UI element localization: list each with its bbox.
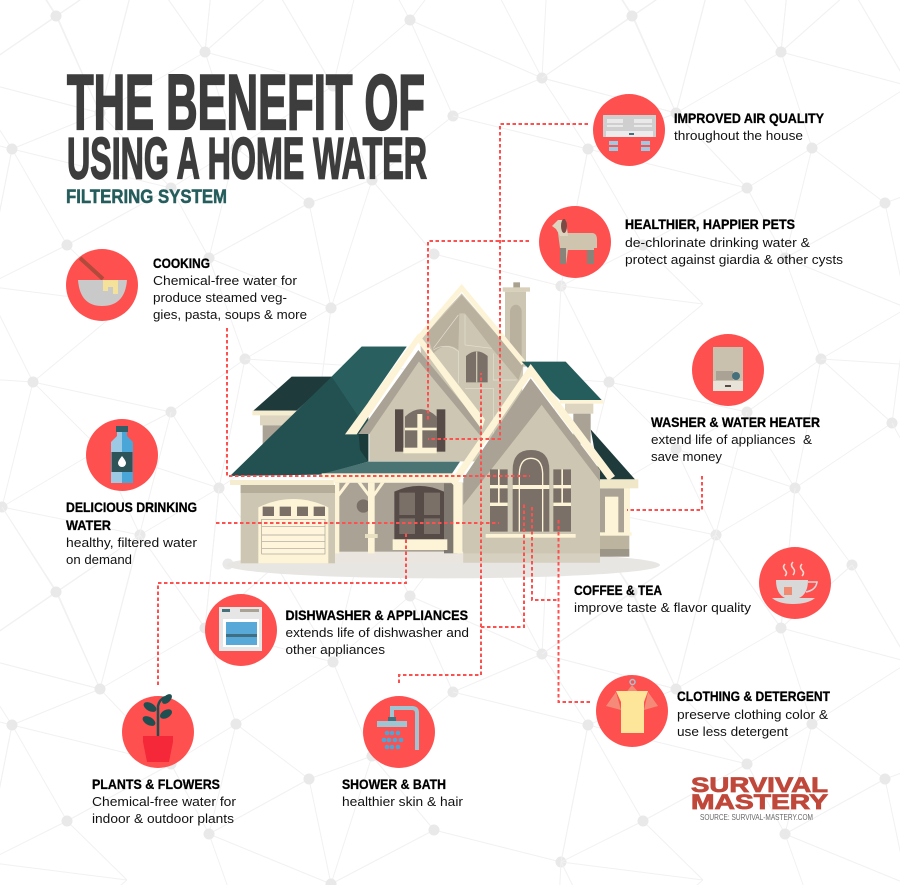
connector: washer and water heater — [627, 476, 702, 510]
left gable — [345, 333, 485, 461]
description: healthy, filtered water — [66, 535, 198, 550]
connector: air quality — [428, 124, 588, 439]
heading: WATER — [66, 517, 111, 533]
heading: HEALTHIER, HAPPIER PETS — [625, 216, 795, 232]
description — [92, 794, 237, 826]
back gable — [417, 284, 526, 440]
heading: COOKING — [153, 255, 210, 271]
icon: potted plant — [122, 692, 194, 768]
arched window — [513, 450, 549, 532]
chimney — [503, 282, 530, 367]
description — [625, 235, 844, 267]
connector: shower — [399, 373, 481, 683]
description: use less detergent — [677, 724, 788, 739]
description — [286, 625, 469, 657]
lower porch roof — [322, 462, 460, 474]
heading: DELICIOUS DRINKING — [66, 499, 197, 515]
heading: COFFEE & TEA — [574, 582, 662, 598]
heading: CLOTHING & DETERGENT — [677, 688, 830, 704]
description: produce steamed veg- — [153, 290, 287, 305]
panel: plants and flowers — [92, 692, 237, 826]
heading — [66, 499, 197, 533]
panel: delicious drinking water — [66, 419, 198, 567]
right roof — [522, 362, 635, 479]
icon: air conditioner — [593, 94, 665, 166]
garage section — [230, 480, 335, 563]
panel: coffee and tea — [574, 547, 831, 619]
icon: dishwasher — [205, 594, 277, 666]
panel: healthier, happier pets — [539, 206, 844, 278]
description: gies, pasta, soups & more — [153, 307, 307, 322]
right gable — [450, 364, 615, 563]
house illustration — [227, 282, 660, 578]
description — [677, 707, 828, 739]
icon: shower head — [363, 696, 435, 768]
side windows — [490, 469, 571, 532]
description — [66, 535, 198, 567]
front door — [394, 486, 444, 539]
title — [66, 58, 427, 208]
connector: clothing — [558, 520, 590, 702]
description: protect against giardia & other cysts — [625, 252, 844, 267]
panel: dishwasher and appliances — [205, 594, 469, 666]
connector: cooking — [227, 328, 530, 476]
right side wing — [600, 479, 638, 557]
description: de-chlorinate drinking water & — [625, 235, 810, 250]
connector: plants — [158, 532, 406, 685]
heading: PLANTS & FLOWERS — [92, 776, 220, 792]
description: extends life of dishwasher and — [286, 625, 469, 640]
logo: survival mastery: MASTERY — [691, 791, 828, 814]
description: Chemical-free water for — [92, 794, 237, 809]
panel: cooking — [66, 249, 307, 322]
description: other appliances — [286, 642, 386, 657]
connector: drinking water — [216, 522, 499, 524]
description — [153, 273, 307, 322]
description: preserve clothing color & — [677, 707, 828, 722]
icon: water heater — [692, 334, 764, 406]
heading: IMPROVED AIR QUALITY — [674, 110, 825, 126]
description: save money — [651, 449, 723, 464]
porch — [322, 473, 463, 563]
description: on demand — [66, 552, 132, 567]
connector lines — [158, 124, 702, 702]
subtitle: FILTERING SYSTEM — [66, 187, 227, 208]
connector: dishwasher — [481, 503, 524, 627]
main left roof — [230, 347, 407, 476]
description: extend life of appliances & — [651, 432, 812, 447]
back left roof — [253, 377, 333, 411]
icon: shirt on hanger — [596, 675, 668, 747]
heading: DISHWASHER & APPLIANCES — [286, 607, 468, 623]
panel: washer and water heater — [651, 334, 820, 464]
logo: survival mastery: SURVIVAL — [691, 773, 828, 797]
logo: survival mastery — [691, 773, 828, 822]
icon: tea cup — [759, 547, 831, 619]
back left eave — [252, 411, 297, 445]
panel: improved air quality — [593, 94, 825, 166]
icon: mixing bowl — [66, 249, 138, 321]
description: indoor & outdoor plants — [92, 811, 235, 826]
heading: SHOWER & BATH — [342, 776, 446, 792]
description: improve taste & flavor quality — [574, 600, 752, 615]
description: Chemical-free water for — [153, 273, 298, 288]
title line 2: USING A HOME WATER — [67, 126, 427, 192]
icon: water bottle — [86, 419, 158, 491]
ground shadow — [227, 552, 660, 578]
icon: dog — [539, 206, 611, 278]
title line 1: THE BENEFIT OF — [67, 58, 425, 146]
connector: coffee — [532, 507, 558, 600]
panel: shower and bath — [342, 696, 464, 809]
source line: SOURCE: SURVIVAL-MASTERY.COM — [700, 812, 813, 822]
description: throughout the house — [674, 128, 803, 143]
description — [651, 432, 812, 464]
description: healthier skin & hair — [342, 794, 464, 809]
connector: pets — [428, 241, 529, 420]
panel: clothing and detergent — [596, 675, 830, 747]
heading: WASHER & WATER HEATER — [651, 414, 820, 430]
shuttered window — [395, 409, 445, 453]
